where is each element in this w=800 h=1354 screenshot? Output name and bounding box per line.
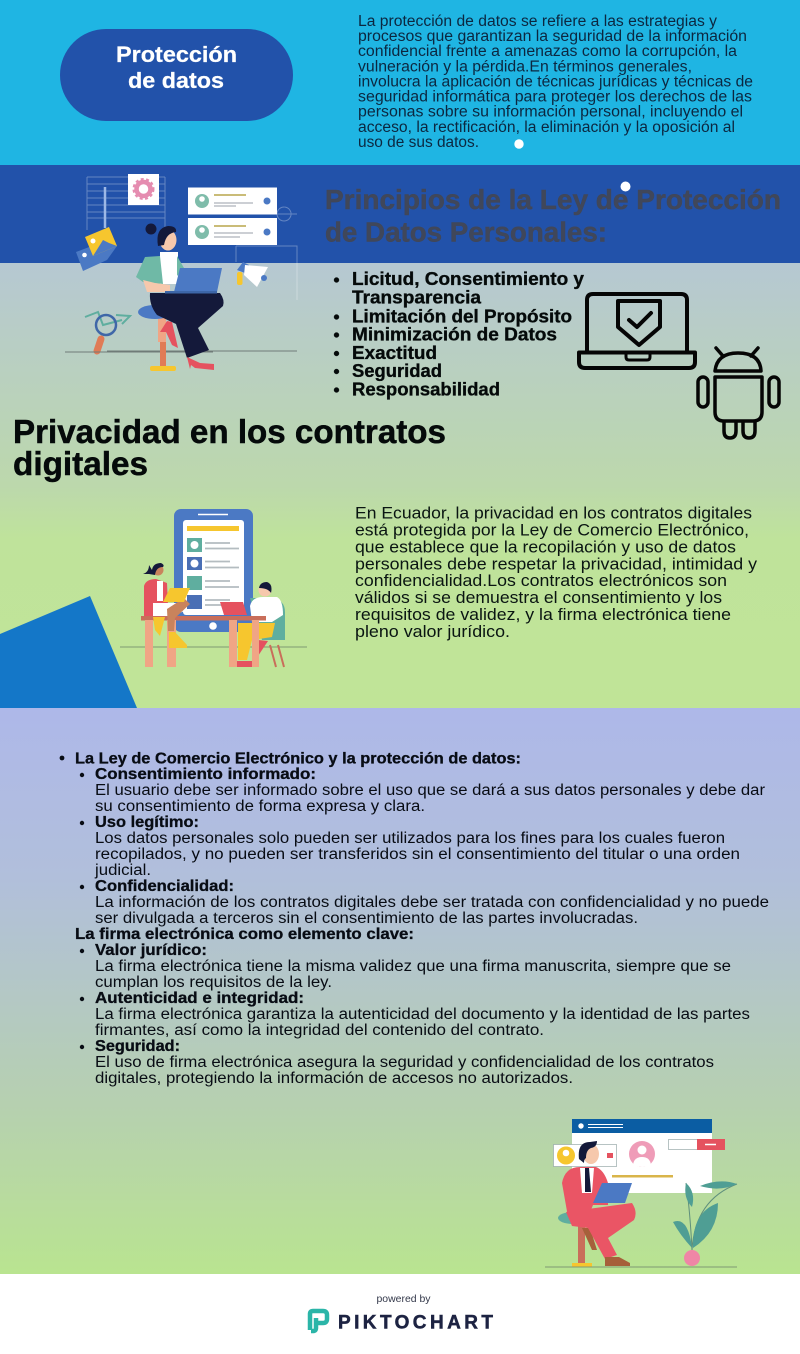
principles list xyxy=(334,269,584,400)
paragraph: privacy in Ecuador: En Ecuador, la privacidad en los contratos digitales xyxy=(355,504,752,522)
principles list: Seguridad xyxy=(352,361,442,381)
decorative white dot xyxy=(514,139,524,149)
principles list: Licitud, Consentimiento y xyxy=(352,269,584,289)
icon: magnifier and arrows xyxy=(85,312,130,351)
section: electronic signature xyxy=(75,926,750,1087)
paragraph: privacy in Ecuador: pleno valor jurídico. xyxy=(355,623,510,641)
profile cards xyxy=(188,188,277,245)
intro paragraph: vulneración y la pérdida.En términos generales, xyxy=(358,58,692,75)
section: electronic signature: Seguridad: xyxy=(95,1038,180,1055)
panel: footer xyxy=(0,1274,800,1354)
section: electronic signature: El uso de firma electrónica asegura la seguridad y confidencialidad de los contratos xyxy=(95,1054,714,1071)
heading: privacy in digital contracts: digitales xyxy=(13,445,148,482)
footer brand xyxy=(310,1294,493,1334)
intro paragraph: procesos que garantizan la seguridad de la información xyxy=(358,28,747,45)
illustration: woman with laptop xyxy=(65,174,297,371)
section: electronic commerce law: judicial. xyxy=(94,862,151,879)
section: electronic commerce law xyxy=(60,750,769,927)
section: electronic commerce law: Los datos personales solo pueden ser utilizados para los fines para los cuales fueron xyxy=(95,830,725,847)
heading: principles xyxy=(325,184,781,248)
illustration: two people at a table with phone xyxy=(120,509,307,667)
table xyxy=(141,616,266,667)
paragraph: privacy in Ecuador: está protegida por la Ley de Comercio Electrónico, xyxy=(355,522,749,540)
section: electronic commerce law: El usuario debe ser informado sobre el uso que se dará a sus datos personales y debe dar xyxy=(95,782,765,799)
man figure xyxy=(220,582,285,667)
title pill: de datos xyxy=(128,68,224,93)
section: electronic signature: Valor jurídico: xyxy=(95,942,207,959)
section: electronic commerce law: su consentimiento de forma expresa y clara. xyxy=(95,798,425,815)
intro paragraph: personas sobre su información personal, incluyendo el xyxy=(358,104,743,121)
woman figure xyxy=(143,563,190,648)
section: electronic signature: digitales, protegiendo la información de accesos no autorizados. xyxy=(95,1070,573,1087)
section: electronic commerce law: La información de los contratos digitales debe ser tratada con confidencialidad y no puede xyxy=(95,894,769,911)
section: electronic commerce law: ser divulgada a terceros sin el consentimiento de las partes involucradas. xyxy=(95,910,638,927)
heading: privacy in digital contracts xyxy=(13,413,446,482)
intro paragraph: uso de sus datos. xyxy=(358,134,479,151)
principles list: Responsabilidad xyxy=(352,380,500,400)
footer brand: powered by xyxy=(376,1294,430,1305)
paragraph: privacy in Ecuador: válidos si se demuestra el consentimiento y los xyxy=(355,589,722,607)
principles list: Exactitud xyxy=(352,343,437,363)
browser window xyxy=(572,1119,725,1193)
decorative white dot xyxy=(620,182,630,192)
principles list: Minimización de Datos xyxy=(352,324,557,344)
panel: principles header band xyxy=(0,165,800,263)
icon: laptop with shield xyxy=(579,294,695,368)
paragraph: privacy in Ecuador: personales debe respetar la privacidad, intimidad y xyxy=(355,556,758,574)
section: electronic commerce law: recopilados, y no pueden ser transferidos sin el consentimiento del titular o una orden xyxy=(95,846,740,863)
intro paragraph: involucra la aplicación de técnicas jurídicas y técnicas de xyxy=(358,74,753,90)
title pill xyxy=(60,29,293,121)
heading: principles: de Datos Personales: xyxy=(325,216,607,248)
small profile box xyxy=(554,1144,616,1166)
icon: android xyxy=(698,348,779,438)
heading: principles: Principios de la Ley de Protección xyxy=(325,184,781,215)
paragraph: privacy in Ecuador: que establece que la recopilación y uso de datos xyxy=(355,538,736,556)
heading: privacy in digital contracts: Privacidad en los contratos xyxy=(13,413,446,450)
section: electronic signature: La firma electrónica tiene la misma validez que una firma manuscrita, siempre que se xyxy=(95,958,731,975)
section: electronic commerce law: Uso legítimo: xyxy=(95,814,199,831)
footer brand: PIKTOCHART xyxy=(338,1312,493,1334)
decorative blue polygon xyxy=(0,596,137,708)
icon: piktochart logo xyxy=(310,1311,327,1331)
section: electronic commerce law: La Ley de Comercio Electrónico y la protección de datos: xyxy=(75,750,521,768)
icon: megaphone xyxy=(237,262,268,287)
section: electronic commerce law: Consentimiento informado: xyxy=(95,766,316,783)
ground line xyxy=(65,351,297,352)
section: electronic signature: La firma electrónica como elemento clave: xyxy=(75,926,414,943)
phone with checklist xyxy=(174,509,253,632)
panel: legal details background xyxy=(0,708,800,1274)
icon: photo cards xyxy=(76,227,117,271)
intro paragraph: seguridad informática para proteger los derechos de las xyxy=(358,89,752,106)
section: electronic signature: firmantes, así como la integridad del contenido del contrato. xyxy=(95,1022,544,1039)
section: electronic signature: Autenticidad e integridad: xyxy=(95,990,304,1007)
man figure xyxy=(558,1141,636,1266)
title pill: Protección xyxy=(116,42,237,67)
principles list: Limitación del Propósito xyxy=(352,306,572,326)
icon: gear card xyxy=(128,174,159,205)
woman figure xyxy=(136,224,224,371)
intro paragraph xyxy=(358,13,753,151)
intro paragraph: acceso, la rectificación, la eliminación y la oposición al xyxy=(358,119,735,136)
paragraph: privacy in Ecuador: confidencialidad.Los contratos electrónicos son xyxy=(355,572,727,590)
paragraph: privacy in Ecuador: requisitos de validez, y la firma electrónica tiene xyxy=(355,606,731,624)
paragraph: privacy in Ecuador xyxy=(355,504,758,641)
legal details text xyxy=(60,750,769,1087)
panel: principles and privacy background xyxy=(0,263,800,708)
section: electronic signature: La firma electrónica garantiza la autenticidad del documento y la identidad de las partes xyxy=(95,1006,750,1023)
section: electronic commerce law: Confidencialidad: xyxy=(95,878,234,895)
intro paragraph: confidencial frente a amenazas como la corrupción, la xyxy=(358,43,737,60)
panel: intro background xyxy=(0,0,800,165)
illustration: man in red suit with profile window xyxy=(545,1119,737,1267)
intro paragraph: La protección de datos se refiere a las estrategias y xyxy=(358,13,717,30)
principles list: Transparencia xyxy=(352,288,482,308)
plant xyxy=(673,1181,737,1266)
section: electronic signature: cumplan los requisitos de la ley. xyxy=(95,974,332,991)
